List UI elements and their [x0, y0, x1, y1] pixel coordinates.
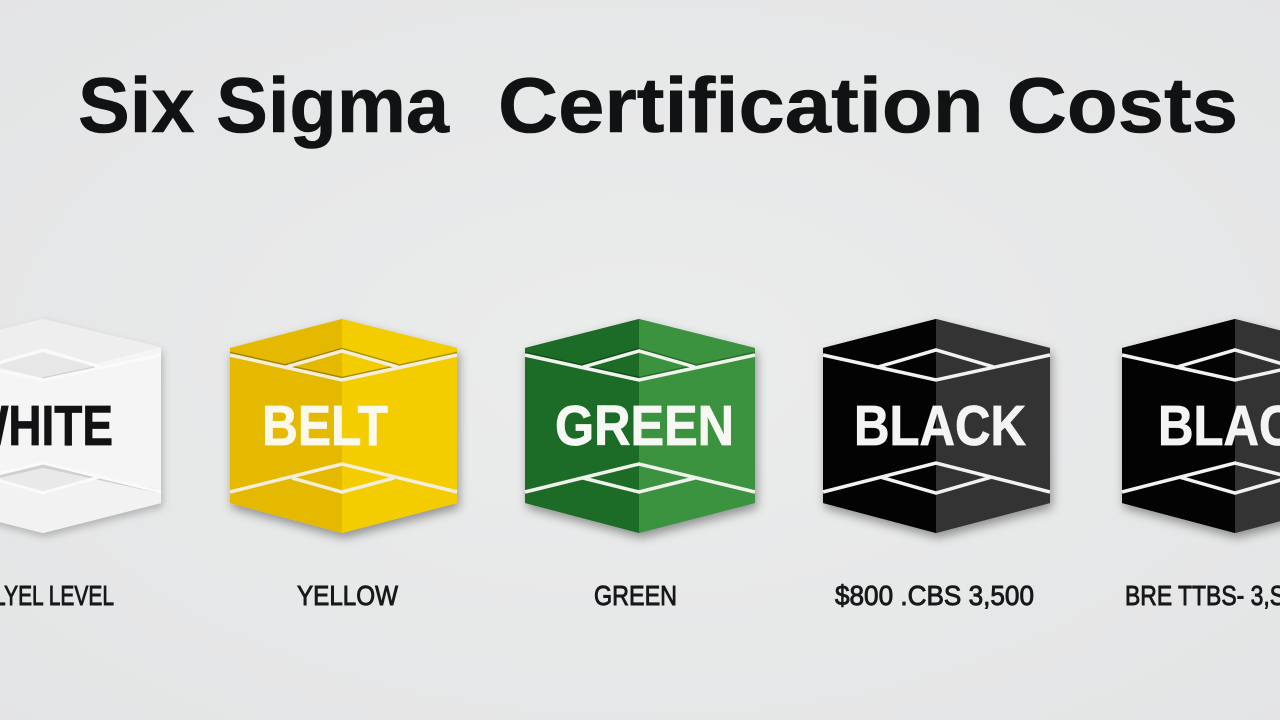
- badge: black, second: [1122, 319, 1280, 533]
- badge: white: [0, 319, 161, 533]
- label: yellow: YELLOW: [297, 580, 398, 611]
- badge: yellow belt: [230, 319, 457, 533]
- badge label: BLACK: BLACK: [854, 394, 1026, 458]
- title: [78, 61, 1238, 149]
- title: Six Sigma: [78, 61, 450, 149]
- badge: green: [525, 319, 755, 533]
- badge label: BELT: BELT: [262, 394, 388, 458]
- badge label: GREEN: GREEN: [555, 394, 734, 458]
- label: black price: $800 .CBS 3,500: [835, 580, 1034, 611]
- title: Certification Costs: [498, 61, 1238, 149]
- label: green: GREEN: [594, 580, 677, 611]
- badge: black: [823, 319, 1050, 533]
